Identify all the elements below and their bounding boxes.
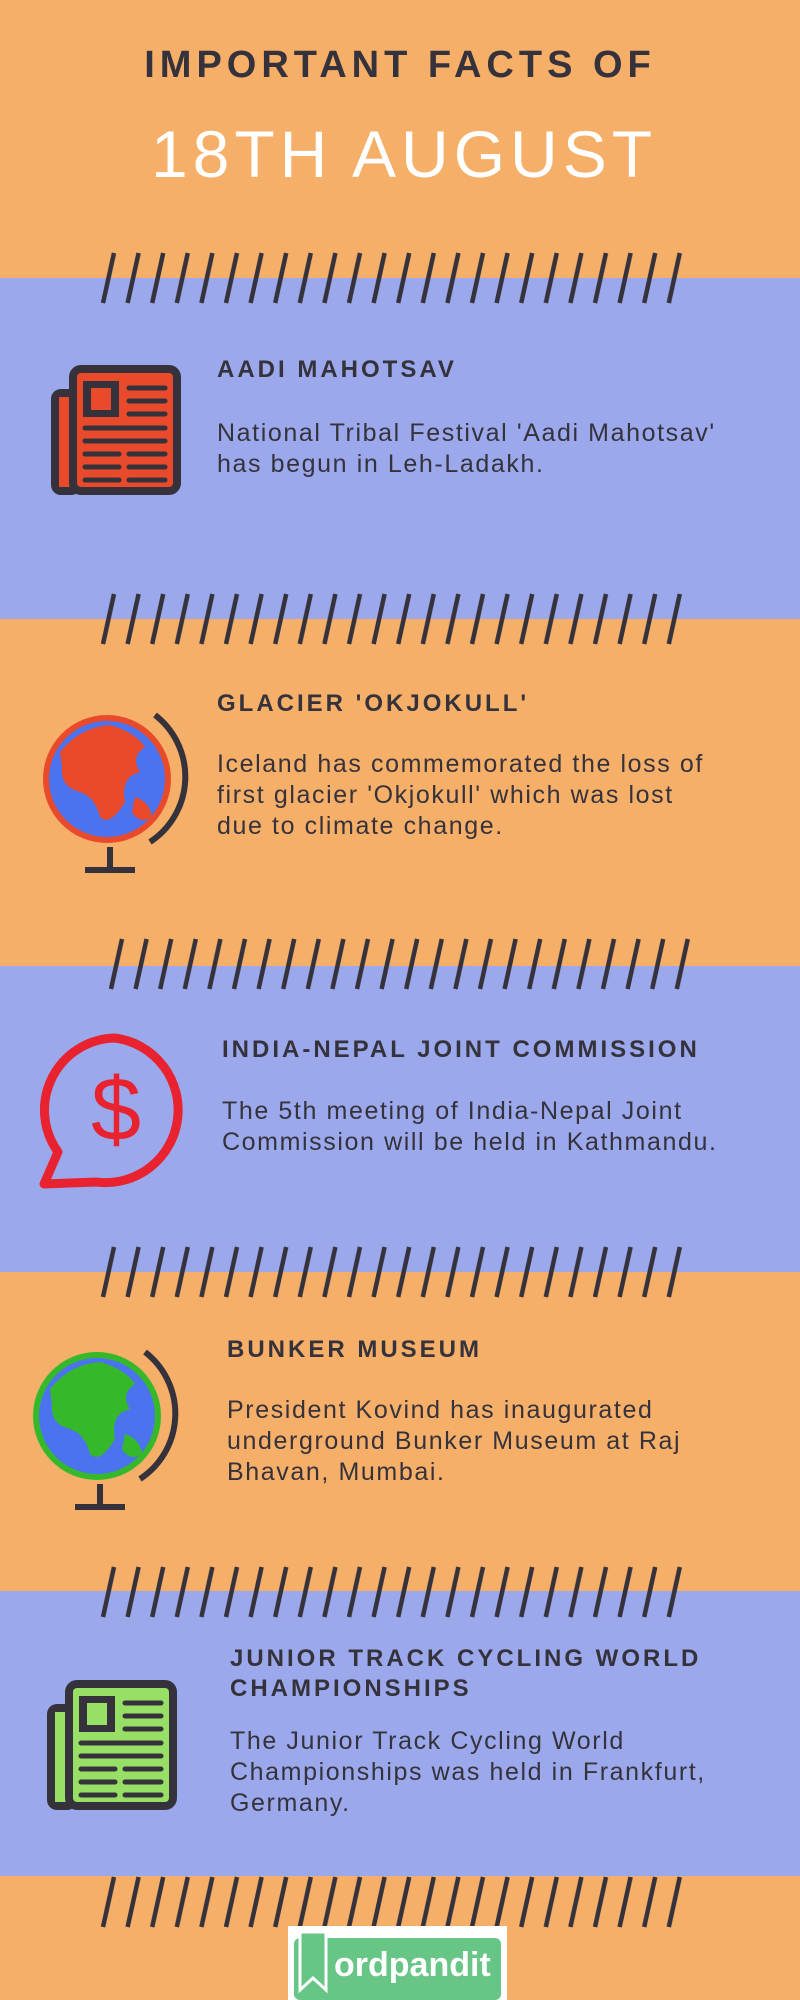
panel: india-nepal: [0, 966, 800, 1272]
heading: GLACIER 'OKJOKULL': [217, 690, 529, 717]
heading: CHAMPIONSHIPS: [230, 1675, 472, 1702]
title line 2: 18TH AUGUST: [151, 117, 657, 191]
body text: due to climate change.: [217, 812, 504, 840]
body text: [217, 750, 704, 840]
body text: Iceland has commemorated the loss of: [217, 750, 704, 778]
heading: [230, 1645, 701, 1702]
body text: The 5th meeting of India-Nepal Joint: [222, 1097, 683, 1125]
body text: President Kovind has inaugurated: [227, 1396, 653, 1424]
body text: has begun in Leh-Ladakh.: [217, 450, 545, 478]
panel: bunker museum: [0, 1272, 800, 1591]
body text: underground Bunker Museum at Raj: [227, 1427, 681, 1455]
body text: Germany.: [230, 1789, 351, 1817]
body text: [222, 1097, 718, 1156]
heading: JUNIOR TRACK CYCLING WORLD: [230, 1645, 701, 1672]
heading: INDIA-NEPAL JOINT COMMISSION: [222, 1036, 700, 1063]
panel: glacier: [0, 619, 800, 966]
logo: wordpandit: ordpandit: [334, 1946, 491, 1984]
panel: header: [0, 0, 800, 278]
icon: dollar speech bubble: [40, 1034, 183, 1188]
body text: Bhavan, Mumbai.: [227, 1458, 446, 1486]
body text: Commission will be held in Kathmandu.: [222, 1128, 718, 1156]
body text: National Tribal Festival 'Aadi Mahotsav': [217, 419, 716, 447]
icon: newspaper red: [51, 365, 181, 495]
body text: [230, 1727, 706, 1817]
heading: BUNKER MUSEUM: [227, 1336, 482, 1363]
body text: Championships was held in Frankfurt,: [230, 1758, 706, 1786]
icon: globe green: [33, 1350, 178, 1510]
title line 1: IMPORTANT FACTS OF: [144, 44, 656, 86]
panel: cycling: [0, 1591, 800, 1876]
icon: dollar speech bubble: $: [91, 1060, 141, 1160]
heading: AADI MAHOTSAV: [217, 356, 457, 383]
body text: [227, 1396, 681, 1486]
logo: wordpandit: [288, 1926, 507, 2000]
body text: [217, 419, 716, 478]
icon: globe red: [43, 712, 188, 873]
body text: first glacier 'Okjokull' which was lost: [217, 781, 674, 809]
panel: aadi mahotsav: [0, 278, 800, 619]
body text: The Junior Track Cycling World: [230, 1727, 625, 1755]
icon: newspaper green: [47, 1680, 177, 1810]
